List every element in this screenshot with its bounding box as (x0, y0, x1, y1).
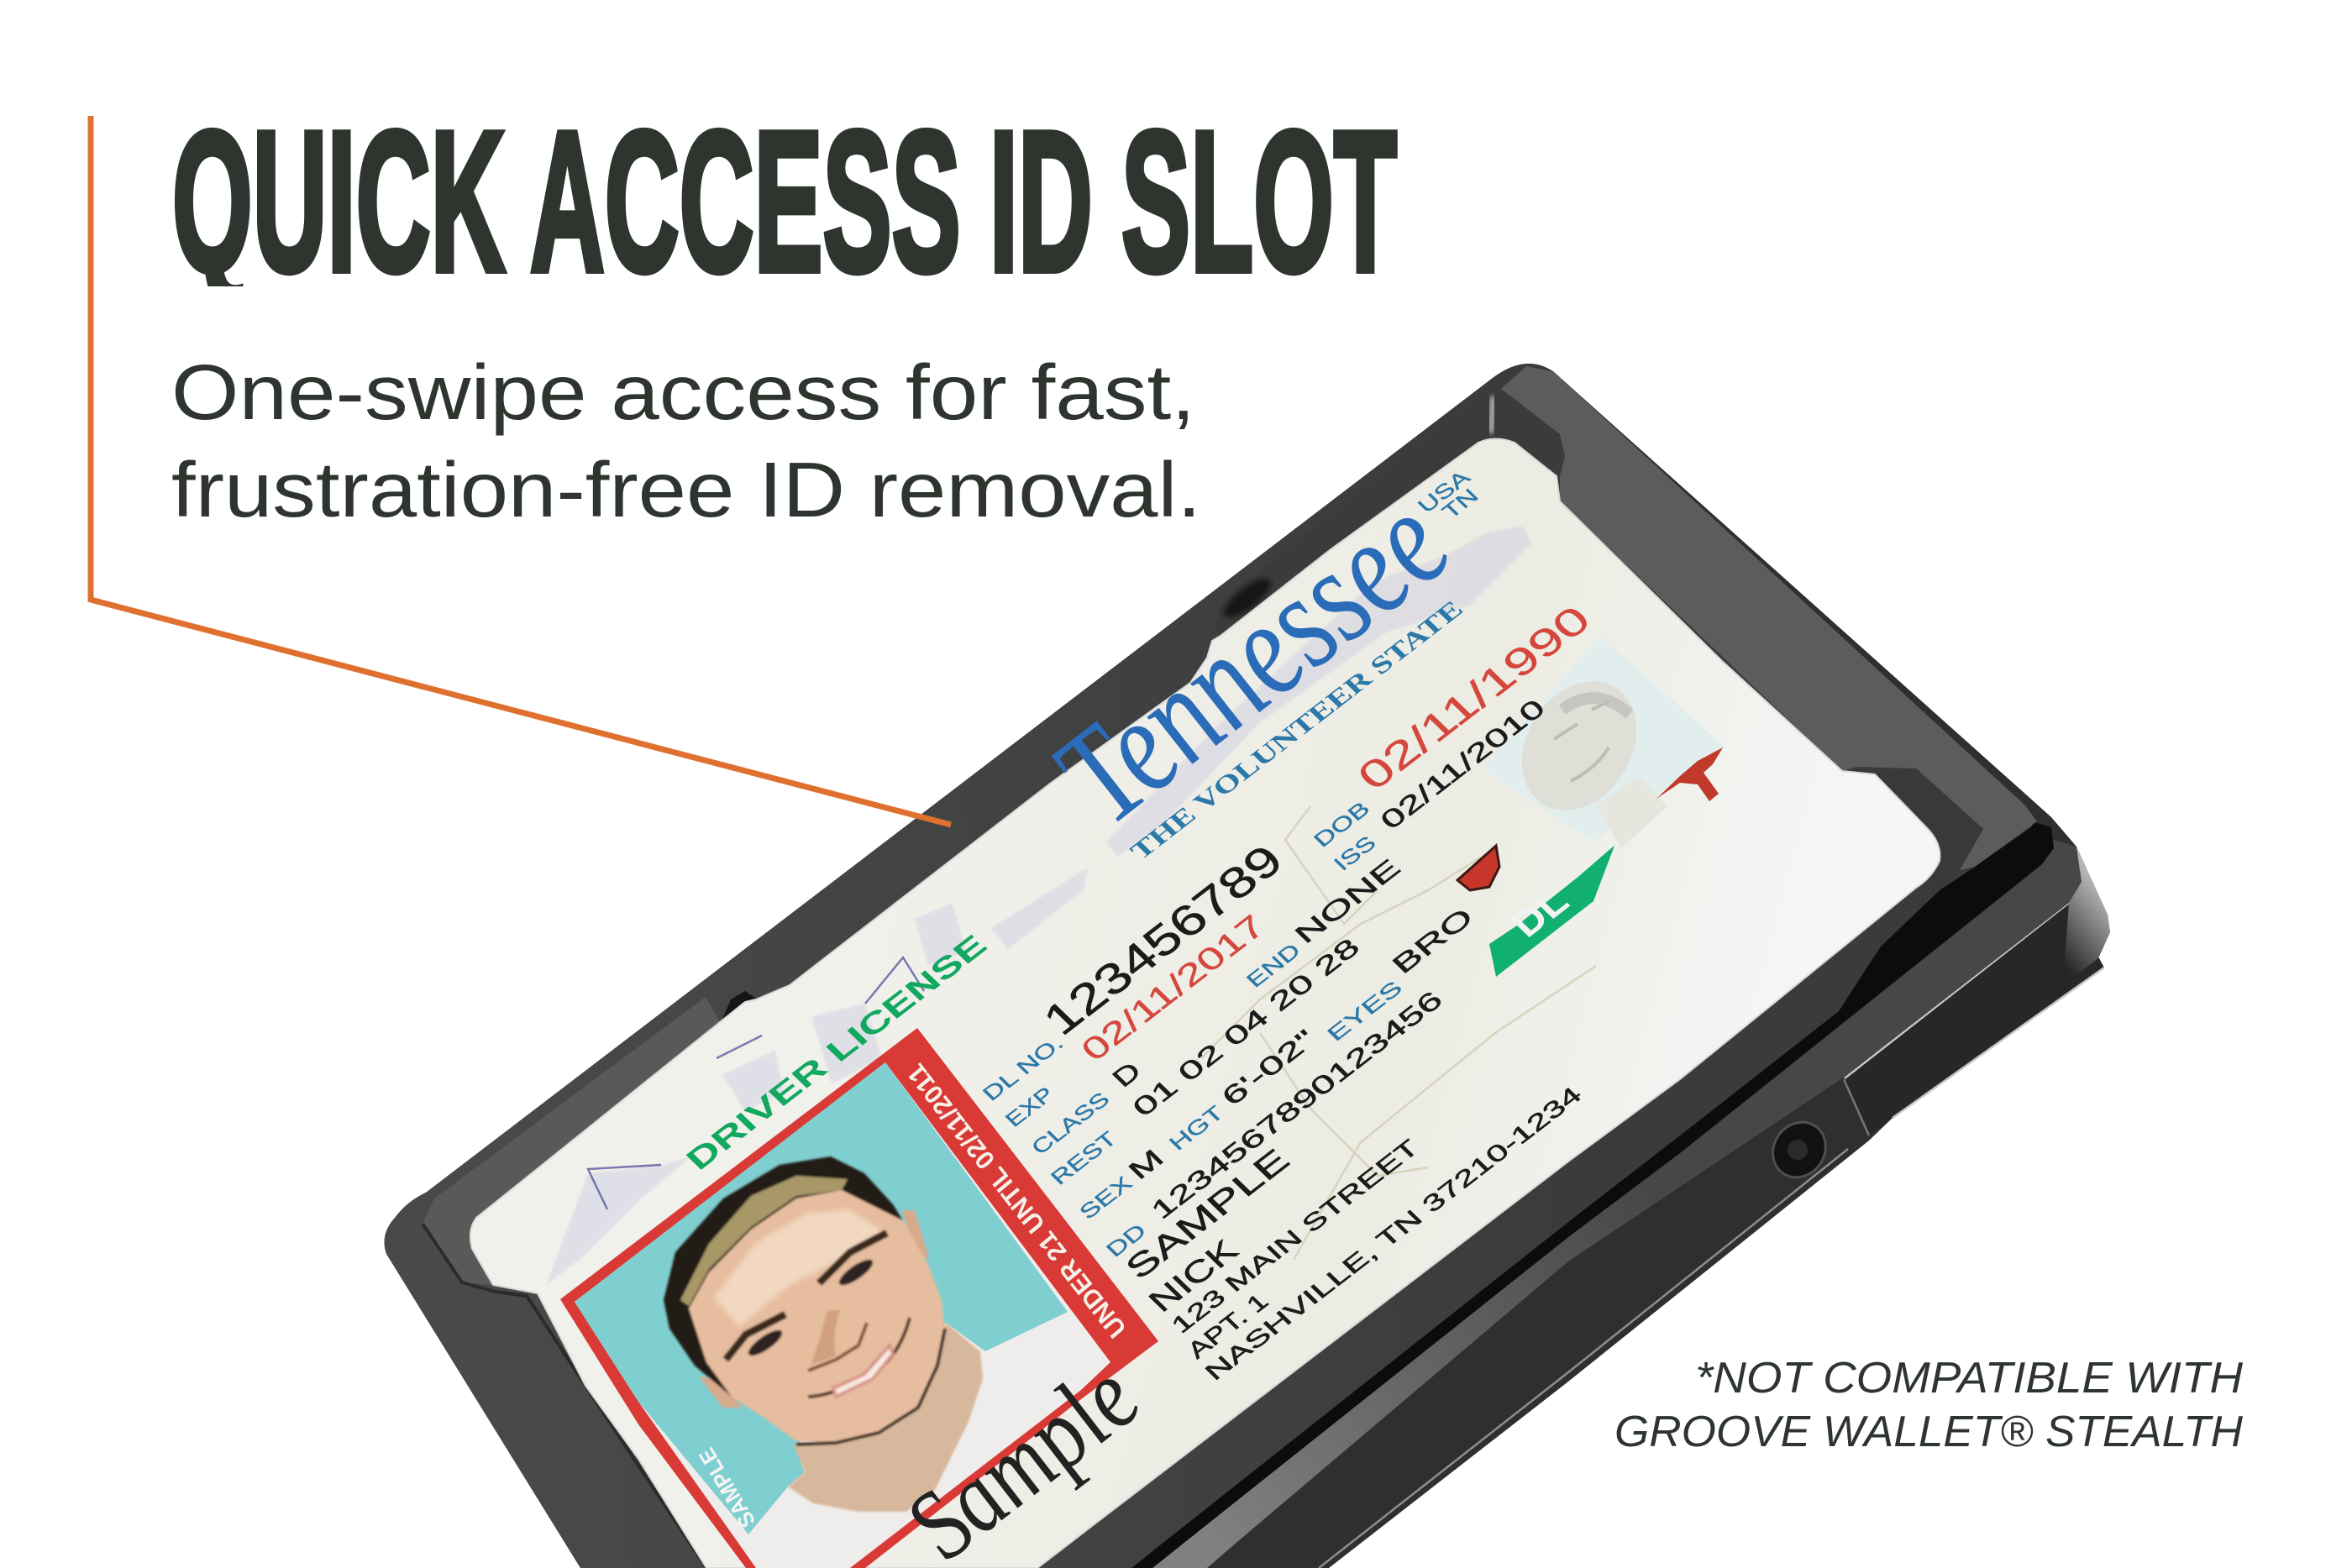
card fields: 02/11/2017 (1074, 909, 1273, 1067)
ID card (470, 438, 1940, 1568)
portrait photo (664, 1156, 983, 1512)
card fields: D (1105, 1057, 1147, 1093)
card fields (979, 598, 1599, 1386)
portrait face (689, 1190, 945, 1441)
card fields: SAMPLE (1118, 1142, 1297, 1286)
card license title: DRIVER LICENSE (680, 929, 994, 1177)
photo shirt field (575, 1062, 1110, 1568)
portrait blond hair streak (680, 1176, 848, 1306)
card fields: 123456789 (1033, 836, 1293, 1044)
card fields: M (1121, 1144, 1169, 1185)
subtitle text: One-swipe access for fast, (171, 349, 1195, 436)
card state name: Tennessee (1020, 470, 1482, 849)
portrait jaw line (796, 1329, 945, 1445)
portrait hair (664, 1156, 911, 1397)
portrait nose (808, 1323, 867, 1371)
wallet side notch block (1845, 903, 2104, 1135)
portrait smile (808, 1318, 910, 1397)
heart mark (1457, 846, 1499, 890)
green state shape (1489, 846, 1614, 977)
card fields: DOB (1310, 798, 1375, 852)
lip gap (721, 991, 760, 1023)
photo background (575, 1062, 1068, 1534)
under-21 band text: UNDER 21 UNTIL 02/11/2011 (901, 1058, 1131, 1344)
card fields: 6'-02" (1215, 1024, 1322, 1111)
card state motto: THE VOLUNTEER STATE (1125, 595, 1468, 865)
card fields: ISS (1330, 832, 1381, 875)
card country labels: USA (1414, 466, 1476, 517)
card fields: HGT (1165, 1102, 1229, 1155)
recess highlight (1490, 396, 1494, 433)
card fields: SEX (1075, 1172, 1137, 1224)
compatibility footnote: GROOVE WALLET® STEALTH (1614, 1408, 2243, 1456)
card fields: NICK (1142, 1234, 1245, 1319)
portrait brows (726, 1233, 887, 1360)
wallet corner gloss (2063, 847, 2110, 985)
compatibility footnote: *NOT COMPATIBLE WITH (1695, 1354, 2243, 1403)
card map lines (1201, 806, 1596, 1260)
photo frame (560, 1028, 1158, 1568)
card fields: DD (1102, 1220, 1152, 1261)
wallet corner recess (1875, 768, 1983, 890)
green state shape: DL (1503, 881, 1578, 945)
card fields: CLASS (1027, 1088, 1115, 1159)
card background artwork (546, 527, 1531, 1285)
portrait neck (788, 1323, 983, 1512)
card fields: APT. 1 (1182, 1289, 1274, 1364)
card fields: 02/11/1990 (1348, 598, 1599, 798)
wallet with ID card (385, 364, 2110, 1568)
wallet right rim (1501, 366, 2037, 870)
portrait ears (901, 1210, 929, 1260)
wallet lower plate (385, 364, 2110, 1568)
card fields: END (1242, 940, 1305, 992)
card fields: 02/11/2010 (1373, 694, 1551, 835)
card artwork outlines (588, 957, 924, 1209)
ghost photo (1482, 636, 1725, 848)
black slot band (1131, 821, 2054, 1568)
portrait forehead highlight (714, 1209, 882, 1327)
wallet left rim (423, 997, 720, 1285)
card fields: NONE (1288, 853, 1406, 949)
card fields: BRO (1385, 903, 1479, 979)
card fields: 01 02 04 20 28 (1126, 932, 1366, 1122)
compatibility footnote (1614, 1354, 2243, 1456)
card fields: 1234567890123456 (1144, 985, 1448, 1225)
subtitle text: frustration-free ID removal. (171, 446, 1201, 533)
left rim groove (423, 1224, 706, 1568)
portrait eyes (745, 1326, 785, 1360)
recess dark notch (1219, 573, 1276, 623)
wallet upper plate (385, 364, 2033, 1568)
card fields: EYES (1323, 977, 1407, 1046)
card fields: EXP (1001, 1083, 1059, 1131)
card fields: DL NO. (979, 1033, 1068, 1105)
callout leader line (91, 116, 951, 825)
subtitle text (171, 349, 1201, 533)
card country labels (1414, 466, 1483, 523)
photo sample label: SAMPLE (694, 1444, 760, 1533)
card fields: NASHVILLE, TN 37210-1234 (1200, 1082, 1588, 1386)
card country labels: TN (1438, 485, 1483, 523)
top rim recess (1215, 389, 1565, 636)
wallet edge highlights (1319, 903, 2104, 1568)
wallet textured band (1152, 840, 2082, 1568)
wallet hole (1762, 1112, 1836, 1188)
card fields: REST (1047, 1128, 1122, 1189)
card fields: 123 MAIN STREET (1166, 1135, 1425, 1339)
